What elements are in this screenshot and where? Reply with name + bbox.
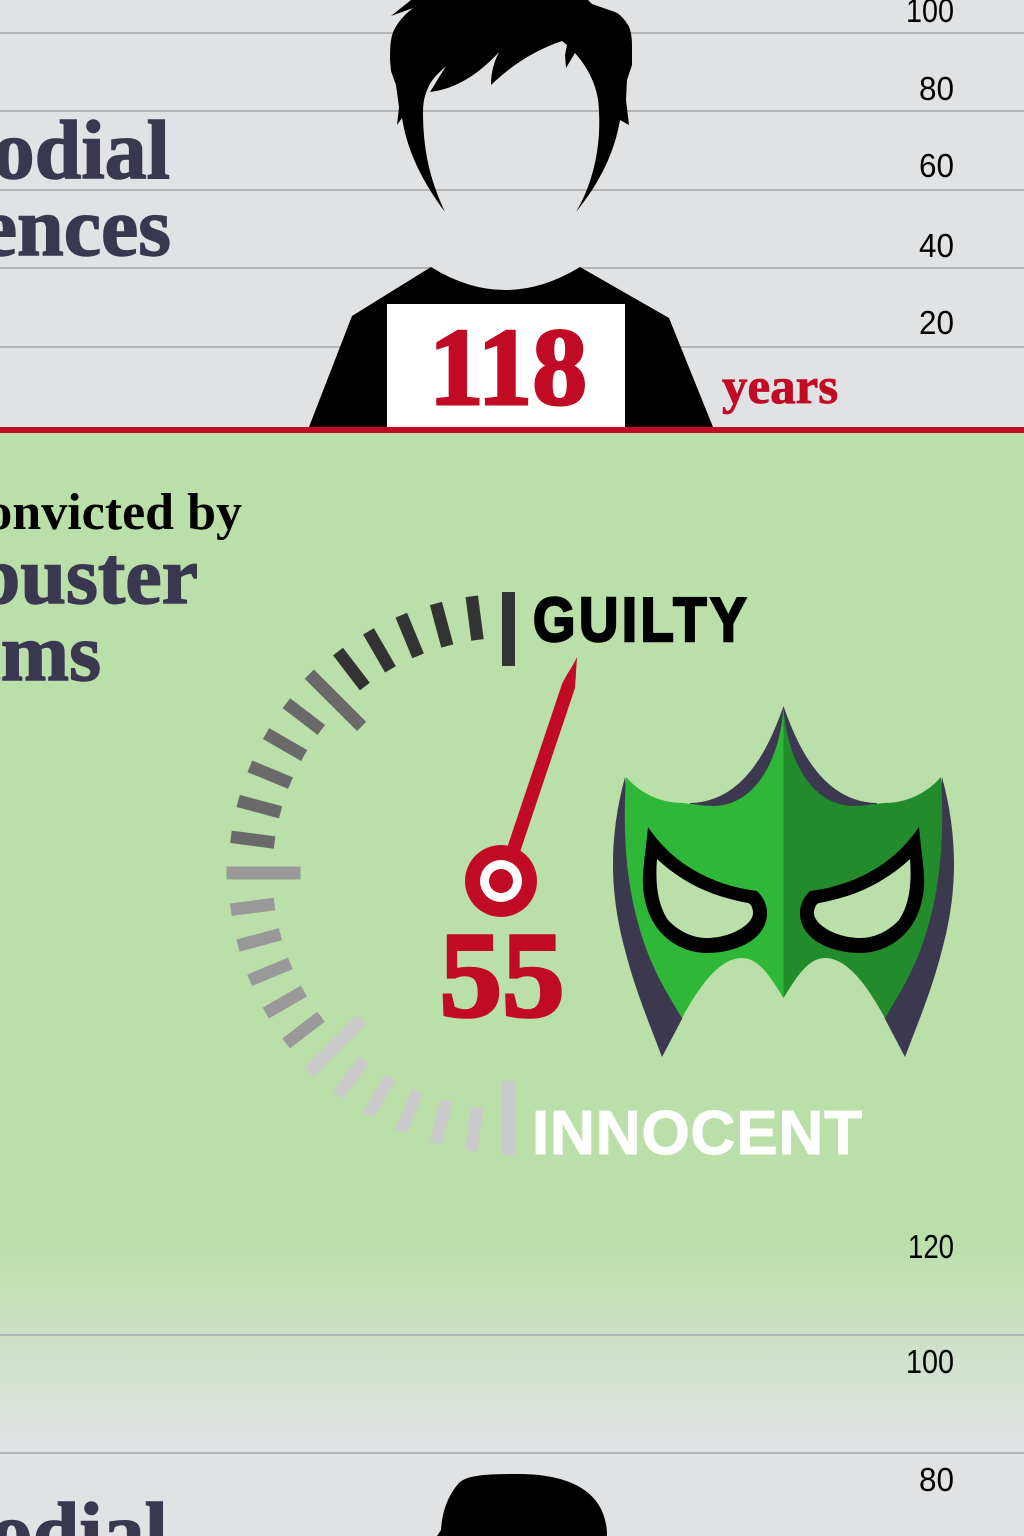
heading: convicted by blockbuster films [0,484,242,698]
icon: mugshot shirt [309,267,713,427]
height scale: lower section: 100 [906,1343,954,1380]
icon: mugshot hair [390,0,632,212]
height scale: top section: 60 [919,147,954,184]
callout: 118 years placard: 118 [429,306,587,428]
height scale: top section: 20 [919,304,954,341]
panel: green fake-verdict section [0,433,1024,1445]
red divider [0,427,1024,433]
gauge needle [465,657,577,917]
heading: custodial sentences [0,104,171,274]
height scale: top section [906,0,954,341]
gauge value: 55: 55 [440,908,564,1043]
icon: green superhero mask [613,706,954,1057]
label: years: years [722,359,838,415]
height scale: top section: 40 [919,227,954,264]
callout: 118 years placard [387,304,625,428]
gauge label: innocent: INNOCENT [532,1099,862,1168]
height scale: lower section: 80 [919,1461,954,1498]
height scale: lower section: 120 [908,1228,954,1265]
height scale: top section: 80 [919,70,954,107]
icon: lower mugshot hair [437,1474,607,1536]
gauge label: guilty: GUILTY [533,586,750,655]
gauge ticks [226,592,515,1155]
height scale: lower section [906,1228,954,1498]
